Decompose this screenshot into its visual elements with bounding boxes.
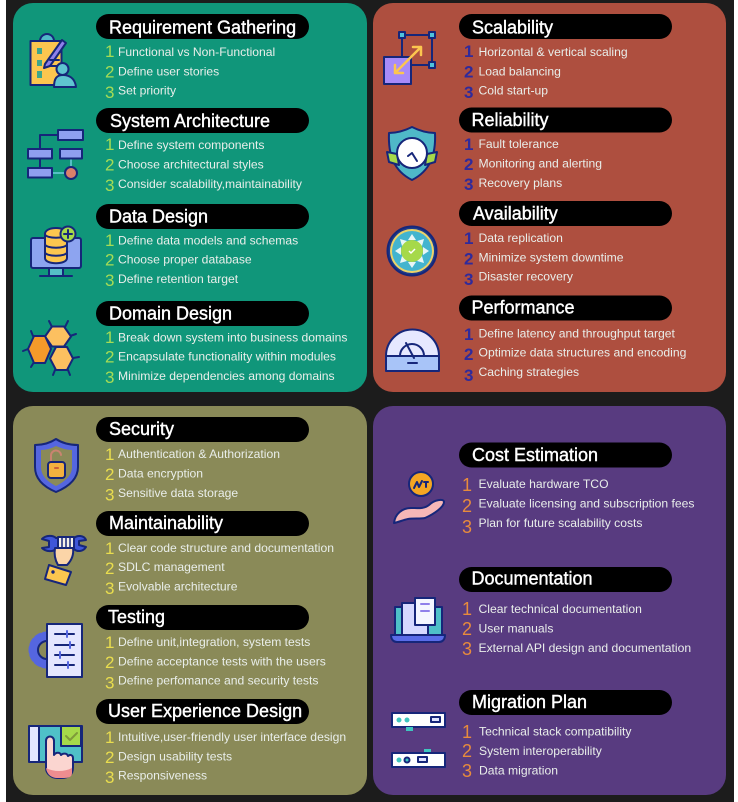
- section: System Architecture: Choose architectural styles: [118, 158, 264, 172]
- section: Reliability: [459, 108, 672, 194]
- panel: olive engineering panel: [13, 406, 367, 795]
- section: Migration Plan: System interoperability: [479, 744, 603, 758]
- section: Reliability: 3: [464, 175, 473, 194]
- section: Documentation: External API design and documentation: [478, 641, 691, 655]
- section: Testing: Define acceptance tests with the users: [118, 654, 326, 668]
- icon: testing gear sheet: [31, 624, 82, 677]
- section: Domain Design: Encapsulate functionality within modules: [118, 350, 336, 364]
- section: System Architecture: Define system components: [118, 138, 264, 152]
- section: Security: [96, 417, 309, 504]
- section: Domain Design: Domain Design: [109, 304, 232, 324]
- section: System Architecture: Consider scalability,maintainability: [118, 177, 303, 191]
- section: Requirement Gathering: Define user stories: [118, 64, 219, 78]
- section: User Experience Design: User Experience Design: [108, 701, 302, 721]
- section: Scalability: 2: [464, 62, 473, 82]
- section: Domain Design: 2: [105, 348, 114, 366]
- section: Migration Plan: 3: [462, 761, 472, 781]
- section: Cost Estimation: [459, 442, 694, 537]
- section: Migration Plan: 2: [462, 741, 472, 761]
- section: Requirement Gathering: Functional vs Non-Functional: [118, 45, 275, 59]
- section: Testing: 3: [105, 674, 114, 692]
- section: Security: Authentication & Authorization: [118, 447, 280, 461]
- section: Reliability: 2: [464, 155, 473, 174]
- section: Documentation: User manuals: [478, 622, 553, 636]
- section: Migration Plan: Technical stack compatibility: [479, 724, 632, 738]
- section: Maintainability: 3: [105, 579, 114, 598]
- section: Domain Design: 3: [105, 368, 114, 387]
- icon: migration servers: [392, 713, 445, 767]
- section: Reliability: Fault tolerance: [478, 137, 559, 151]
- section: Maintainability: 2: [105, 559, 114, 578]
- section: System Architecture: System Architecture: [110, 111, 270, 131]
- panel: purple delivery panel: [373, 406, 726, 795]
- section: System Architecture: [96, 108, 309, 195]
- icon: performance gauge: [386, 330, 439, 371]
- section: Performance: Caching strategies: [478, 365, 579, 379]
- section: Testing: Define unit,integration, system tests: [118, 635, 310, 649]
- icon: database on monitor: [31, 226, 81, 276]
- section: Availability: 3: [464, 270, 473, 289]
- section: Performance: [459, 296, 686, 385]
- icon: documentation laptop: [391, 598, 445, 642]
- section: Availability: Minimize system downtime: [478, 250, 624, 264]
- panel: red quality panel: [373, 3, 726, 392]
- section: Availability: Data replication: [478, 231, 563, 245]
- icon: scalability resize square: [384, 32, 435, 84]
- panel: green design panel: [13, 3, 367, 392]
- section: Security: Security: [109, 419, 174, 439]
- icon: system architecture flowchart: [28, 130, 83, 179]
- section: Documentation: 2: [462, 619, 472, 639]
- section: User Experience Design: 3: [105, 768, 114, 787]
- section: User Experience Design: Responsiveness: [118, 768, 207, 782]
- section: Maintainability: Maintainability: [109, 513, 223, 533]
- section: Maintainability: SDLC management: [118, 560, 225, 574]
- section: Domain Design: 1: [105, 328, 114, 347]
- icon: cost coin over hand: [394, 472, 444, 523]
- section: Data Design: Define retention target: [118, 272, 239, 286]
- section: Testing: 2: [105, 653, 114, 672]
- section: Scalability: 1: [464, 42, 473, 61]
- section: Documentation: 1: [462, 599, 472, 619]
- section: Availability: Availability: [473, 204, 558, 224]
- section: Security: 1: [105, 445, 114, 464]
- section: Migration Plan: [459, 690, 672, 781]
- section: Requirement Gathering: 3: [105, 83, 114, 102]
- section: Cost Estimation: Plan for future scalability costs: [478, 516, 642, 530]
- section: Migration Plan: Migration Plan: [472, 692, 587, 712]
- section: Cost Estimation: Evaluate licensing and subscription fees: [478, 496, 694, 510]
- section: Documentation: [459, 567, 691, 659]
- section: Data Design: 1: [105, 231, 114, 250]
- section: Scalability: 3: [464, 83, 473, 102]
- icon: availability dial: [388, 226, 436, 276]
- section: Migration Plan: 1: [462, 722, 472, 742]
- section: Cost Estimation: 1: [462, 475, 472, 495]
- section: User Experience Design: Intuitive,user-friendly user interface design: [118, 730, 346, 744]
- section: Scalability: [459, 14, 672, 102]
- section: Maintainability: 1: [105, 539, 114, 558]
- section: User Experience Design: Design usability tests: [118, 750, 232, 764]
- section: Data Design: [96, 204, 309, 290]
- icon: requirement checklist: [30, 34, 76, 87]
- section: Requirement Gathering: 1: [105, 42, 114, 61]
- section: Data Design: Define data models and schemas: [118, 234, 298, 248]
- section: Reliability: Monitoring and alerting: [478, 156, 602, 170]
- section: System Architecture: 3: [105, 176, 114, 195]
- section: Scalability: Cold start-up: [478, 84, 548, 98]
- section: Requirement Gathering: Requirement Gathering: [109, 18, 296, 38]
- section: Reliability: Reliability: [472, 110, 549, 130]
- section: Scalability: Scalability: [472, 18, 553, 38]
- section: User Experience Design: 2: [105, 748, 114, 767]
- section: Data Design: 3: [105, 271, 114, 290]
- section: System Architecture: 2: [105, 156, 114, 174]
- section: Testing: [96, 605, 326, 692]
- section: Testing: 1: [105, 633, 114, 652]
- section: Data Design: 2: [105, 250, 114, 270]
- section: User Experience Design: 1: [105, 728, 114, 747]
- section: Cost Estimation: 2: [462, 496, 472, 516]
- section: Performance: Performance: [472, 298, 575, 318]
- section: Security: Data encryption: [118, 466, 203, 480]
- section: Domain Design: Break down system into business domains: [118, 330, 347, 344]
- section: Performance: 3: [464, 366, 473, 385]
- section: Domain Design: [96, 301, 347, 387]
- section: Availability: 2: [464, 250, 473, 268]
- section: Security: Sensitive data storage: [118, 486, 238, 500]
- icon: maintainability wrench fist: [42, 536, 86, 585]
- icon: domain hexagons: [23, 321, 79, 375]
- section: Requirement Gathering: 2: [105, 62, 114, 82]
- section: Cost Estimation: Cost Estimation: [472, 445, 598, 465]
- section: Performance: Define latency and throughput target: [478, 326, 676, 340]
- section: Performance: 2: [464, 345, 473, 364]
- section: Availability: [459, 201, 672, 289]
- section: User Experience Design: [96, 699, 346, 787]
- section: Data Design: Data Design: [109, 206, 208, 226]
- section: Domain Design: Minimize dependencies among domains: [118, 369, 335, 383]
- section: Performance: Optimize data structures and encoding: [478, 346, 686, 360]
- section: Documentation: Clear technical documentation: [478, 602, 642, 616]
- icon: security shield lock: [35, 439, 78, 492]
- section: Security: 2: [105, 465, 114, 484]
- section: Testing: Testing: [108, 607, 165, 627]
- section: Security: 3: [105, 486, 114, 504]
- section: Maintainability: [96, 511, 334, 598]
- section: Availability: 1: [464, 229, 473, 248]
- section: Requirement Gathering: Set priority: [118, 84, 177, 98]
- section: Performance: 1: [464, 325, 473, 344]
- section: Reliability: 1: [464, 135, 473, 154]
- section: Migration Plan: Data migration: [479, 764, 558, 778]
- section: Requirement Gathering: [96, 14, 309, 102]
- section: Maintainability: Clear code structure and documentation: [118, 541, 334, 555]
- section: Testing: Define perfomance and security tests: [118, 674, 318, 688]
- section: Scalability: Horizontal & vertical scaling: [478, 45, 628, 59]
- section: System Architecture: 1: [105, 135, 114, 154]
- section: Reliability: Recovery plans: [478, 176, 562, 190]
- icon: user experience touch: [29, 726, 82, 778]
- section: Scalability: Load balancing: [478, 64, 561, 78]
- icon: reliability clock shield: [387, 127, 437, 180]
- section: Cost Estimation: Evaluate hardware TCO: [478, 477, 609, 491]
- section: Availability: Disaster recovery: [478, 270, 574, 284]
- section: Maintainability: Evolvable architecture: [118, 580, 238, 594]
- section: Documentation: Documentation: [472, 568, 593, 588]
- section: Data Design: Choose proper database: [118, 252, 252, 266]
- section: Documentation: 3: [462, 639, 472, 659]
- section: Cost Estimation: 3: [462, 517, 472, 537]
